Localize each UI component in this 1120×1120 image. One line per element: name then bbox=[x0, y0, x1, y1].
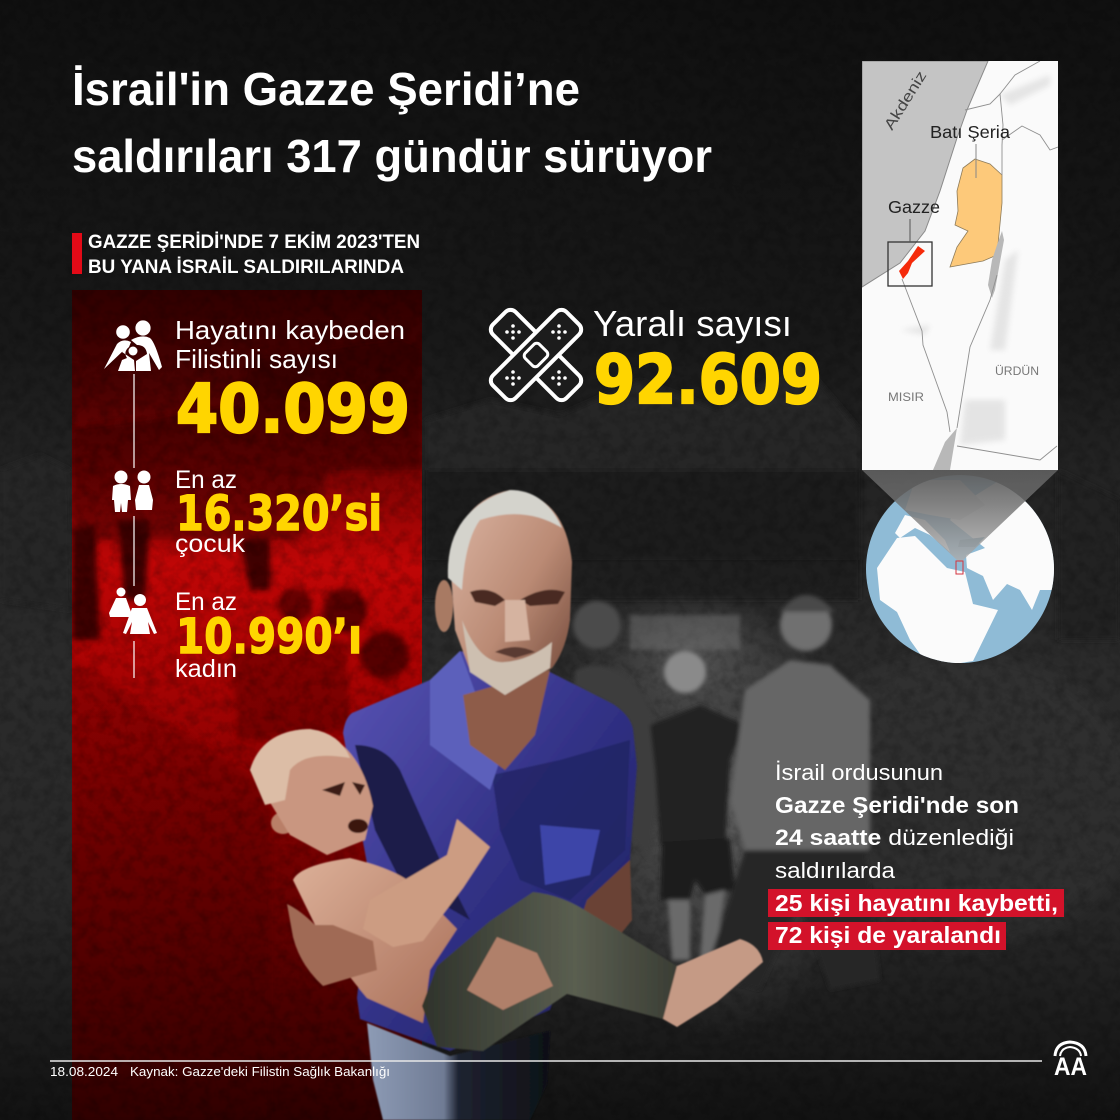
callout: last 24 hours: 25 kişi hayatını kaybetti, bbox=[775, 890, 1058, 916]
selection marker bbox=[956, 561, 963, 574]
man's right forearm bbox=[580, 860, 632, 960]
map labels: MISIR bbox=[888, 390, 924, 404]
man's blue shirt bbox=[343, 651, 637, 1051]
shirt shadow and pocket bbox=[355, 745, 470, 920]
stat: women bbox=[175, 588, 362, 683]
subtitle with red marker bbox=[72, 232, 420, 278]
footer: date and source bbox=[50, 1061, 1042, 1079]
child's trousers bbox=[422, 892, 677, 1051]
child's foot bbox=[663, 939, 763, 1027]
logo: Anadolu Agency bbox=[1054, 1042, 1087, 1081]
map labels bbox=[881, 68, 1039, 404]
background crowd figures bbox=[570, 595, 880, 990]
stat: deaths: Hayatını kaybeden bbox=[175, 315, 405, 345]
stat: children bbox=[175, 466, 382, 558]
stat: women: 10.990’ı bbox=[176, 609, 362, 665]
map of Gaza and the region bbox=[862, 61, 1058, 470]
stat: wounded: Yaralı sayısı bbox=[593, 303, 792, 344]
icon: family bbox=[104, 320, 162, 371]
child's head bbox=[250, 729, 373, 855]
stat: wounded bbox=[593, 303, 822, 420]
stat: women: En az bbox=[175, 588, 237, 616]
man's left hand under child bbox=[287, 904, 377, 986]
map labels: Akdeniz bbox=[881, 68, 930, 133]
Dead Sea and Gulf of Aqaba bbox=[933, 231, 1004, 470]
map labels: Gazze bbox=[888, 197, 940, 217]
child's arm bbox=[363, 819, 490, 947]
icon: women bbox=[109, 588, 157, 634]
West Bank bbox=[950, 159, 1002, 267]
callout: last 24 hours: saldırılarda bbox=[775, 858, 896, 883]
stat: children: En az bbox=[175, 466, 237, 494]
footer: date and source: 18.08.2024 bbox=[50, 1065, 118, 1079]
stat: deaths: Filistinli sayısı bbox=[175, 344, 338, 374]
stat: children: 16.320’si bbox=[176, 486, 382, 542]
Mediterranean Sea bbox=[862, 61, 988, 287]
icon: crossed bandages bbox=[488, 307, 584, 403]
stat: deaths: 40.099 bbox=[176, 370, 410, 448]
stat: women: kadın bbox=[175, 655, 237, 683]
selection box around Gaza bbox=[888, 242, 932, 286]
title: saldırıları 317 gündür sürüyor bbox=[72, 130, 712, 182]
callout: last 24 hours: İsrail ordusunun bbox=[775, 760, 943, 785]
stat: wounded: 92.609 bbox=[594, 341, 822, 420]
child's body bbox=[293, 858, 457, 1023]
callout: last 24 hours: 24 saatte düzenlediği bbox=[775, 825, 1014, 850]
stat: children: çocuk bbox=[175, 530, 246, 558]
callout: last 24 hours: Gazze Şeridi'nde son bbox=[775, 792, 1019, 818]
timeline connector bbox=[133, 374, 135, 678]
subtitle with red marker: BU YANA İSRAİL SALDIRILARINDA bbox=[88, 257, 404, 278]
callout: last 24 hours bbox=[768, 760, 1064, 950]
footer: date and source: Kaynak: Gazze'deki Filistin Sağlık Bakanlığı bbox=[130, 1065, 390, 1079]
icon: children bbox=[112, 470, 153, 512]
stat: deaths bbox=[175, 315, 410, 448]
locator globe bbox=[862, 470, 1060, 668]
callout: last 24 hours: 72 kişi de yaralandı bbox=[775, 922, 1001, 948]
man's head bbox=[435, 490, 572, 695]
map zoom cone bbox=[862, 470, 1058, 563]
man's hand on trousers bbox=[467, 937, 553, 1010]
red stats panel background bbox=[72, 290, 422, 1120]
terrain shading bbox=[900, 75, 1050, 445]
map labels: ÜRDÜN bbox=[995, 364, 1039, 378]
Gaza Strip bbox=[899, 246, 925, 279]
main photo: man carrying wounded child bbox=[250, 490, 763, 1120]
subtitle with red marker: GAZZE ŞERİDİ'NDE 7 EKİM 2023'TEN bbox=[88, 232, 420, 253]
borders bbox=[902, 61, 1058, 460]
logo: Anadolu Agency: AA bbox=[1054, 1053, 1087, 1081]
title bbox=[72, 63, 712, 182]
man's jeans bbox=[367, 1023, 550, 1120]
man's neck bbox=[463, 670, 550, 770]
map labels: Batı Şeria bbox=[930, 122, 1010, 142]
title: İsrail'in Gazze Şeridi’ne bbox=[72, 63, 580, 115]
